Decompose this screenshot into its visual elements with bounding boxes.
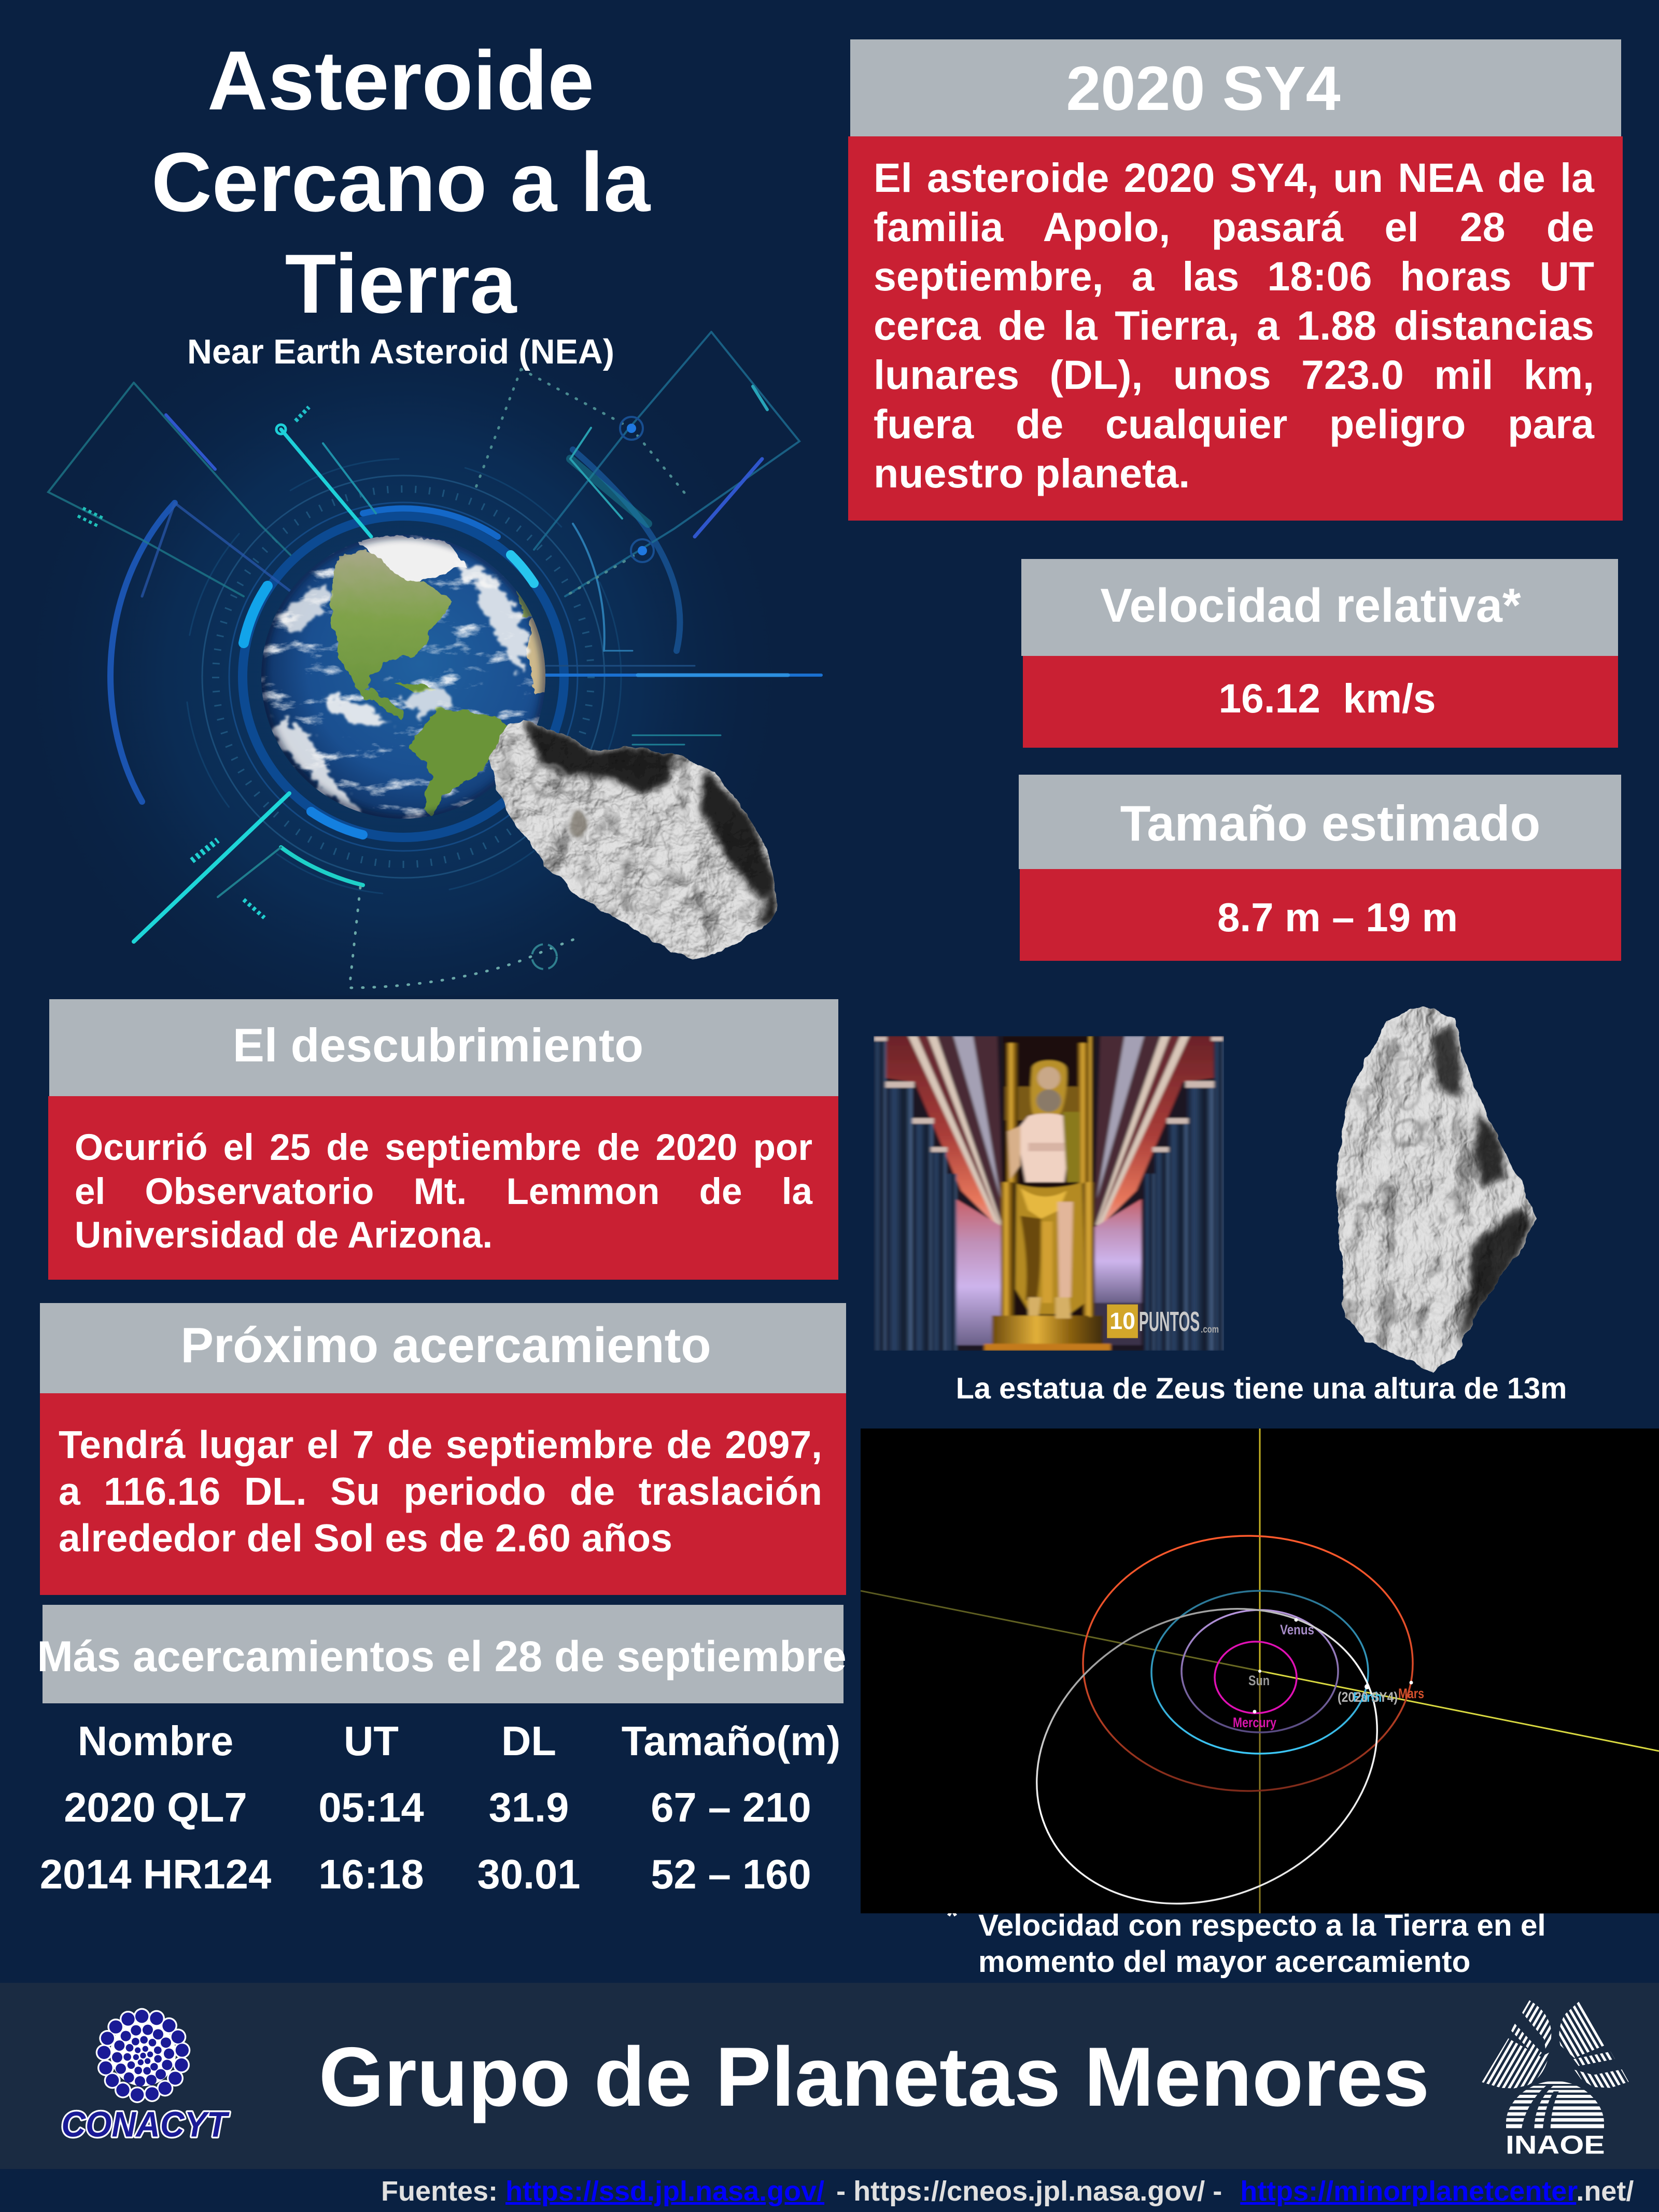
logo: CONACYT: CONACYT xyxy=(61,2105,230,2145)
footnote: Velocidad con respecto a la Tierra en el xyxy=(978,1909,1546,1942)
heading: velocidad relativa: Velocidad relativa* xyxy=(1100,579,1521,632)
text: summary: septiembre, a las 18:06 horas UT xyxy=(874,253,1594,299)
text: summary: familia Apolo, pasará el 28 de xyxy=(874,204,1594,250)
heading: el descubrimiento: El descubrimiento xyxy=(233,1019,643,1072)
red box: descubrimiento xyxy=(48,1096,838,1280)
footnote asterisk: * xyxy=(946,1899,958,1933)
planet labels: Mars xyxy=(1398,1686,1424,1701)
table: close approaches: UT xyxy=(344,1718,399,1764)
text: summary xyxy=(874,155,1595,496)
planets xyxy=(1253,1618,1413,1713)
columns xyxy=(874,1039,1224,1351)
table: close approaches xyxy=(31,1711,861,1903)
heading: tamano estimado: Tamaño estimado xyxy=(1120,796,1540,851)
title xyxy=(151,34,651,331)
limb shadow xyxy=(261,535,545,819)
table: close approaches: 31.9 xyxy=(489,1784,569,1830)
planet labels xyxy=(1233,1622,1424,1730)
outer arcs xyxy=(110,503,175,802)
header box: mas acercamientos xyxy=(43,1605,843,1703)
orbits xyxy=(988,1536,1426,1958)
text: proximo acercamiento: a 116.16 DL. Su periodo de traslación xyxy=(59,1469,822,1513)
text: proximo acercamiento: alrededor del Sol es de 2.60 años xyxy=(59,1516,672,1560)
text: descubrimiento: Ocurrió el 25 de septiembre de 2020 por xyxy=(75,1127,812,1168)
text: summary: lunares (DL), unos 723.0 mil km, xyxy=(874,352,1594,398)
table: close approaches: Nombre xyxy=(78,1718,233,1764)
footer band xyxy=(0,1983,1659,2169)
cloud layer under land xyxy=(261,535,540,819)
red box: proximo acercamiento xyxy=(40,1393,846,1595)
red box: summary xyxy=(848,136,1623,521)
logo: INAOE: INAOE xyxy=(1506,2130,1605,2159)
caption: Zeus statue: La estatua de Zeus tiene una altura de 13m xyxy=(956,1372,1567,1405)
value: velocidad: 16.12 km/s xyxy=(1218,676,1436,721)
illustration: Earth globe xyxy=(261,535,545,819)
watermark xyxy=(1107,1305,1138,1338)
artwork layer: PUNTOS xyxy=(1139,1306,1200,1337)
ceiling, left and right xyxy=(874,1036,1001,1230)
table: close approaches: 16:18 xyxy=(318,1851,424,1897)
planet labels: Earth xyxy=(1353,1689,1382,1705)
bright ring segments xyxy=(244,586,268,643)
table: close approaches: 2014 HR124 xyxy=(40,1851,271,1897)
table: close approaches: Tamaño(m) xyxy=(622,1718,840,1764)
illustration: asteroid at scale xyxy=(1327,1001,1545,1379)
sources: Fuentes: https://ssd.jpl.nasa.gov/ - https://cneos.jpl.nasa.gov/ - https://minorplanetcenter.net/ xyxy=(381,2176,1634,2207)
ray lines xyxy=(908,1036,1002,1229)
bright cyan lines xyxy=(281,429,371,537)
text: summary: El asteroide 2020 SY4, un NEA de la xyxy=(874,155,1594,201)
inner strips xyxy=(937,1036,1003,1227)
ice cap xyxy=(358,535,467,583)
figure xyxy=(1031,1060,1067,1117)
header box: proximo acercamiento xyxy=(40,1303,846,1393)
planet labels: Sun xyxy=(1248,1673,1270,1688)
illustration: asteroid beside Earth xyxy=(482,716,788,970)
text: summary: nuestro planeta. xyxy=(874,450,1190,496)
subtitle: Near Earth Asteroid (NEA) xyxy=(187,333,614,371)
table: close approaches: 05:14 xyxy=(318,1784,424,1830)
table: close approaches: 2020 QL7 xyxy=(64,1784,247,1830)
planet labels: Venus xyxy=(1280,1622,1314,1637)
table: close approaches: 67 – 210 xyxy=(651,1784,811,1830)
text: descubrimiento: Universidad de Arizona. xyxy=(75,1215,493,1256)
footer title: Grupo de Planetas Menores xyxy=(319,2030,1429,2124)
title: Cercano a la xyxy=(151,136,650,229)
wedges xyxy=(48,383,290,596)
text: summary: fuera de cualquier peligro para xyxy=(874,401,1594,447)
text: descubrimiento xyxy=(75,1127,813,1256)
logo: INAOE xyxy=(1482,2000,1629,2159)
continents xyxy=(332,535,550,817)
red box: velocidad xyxy=(1023,656,1618,748)
header box: velocidad xyxy=(1021,559,1618,656)
orbit diagram xyxy=(861,1429,1659,1958)
logo: CONACYT xyxy=(61,2008,230,2145)
text: proximo acercamiento xyxy=(59,1423,822,1560)
header box: tamano xyxy=(1019,775,1621,869)
cloud swirls xyxy=(275,560,529,814)
heading: 2020 SY4: 2020 SY4 xyxy=(1066,53,1341,123)
text: descubrimiento: el Observatorio Mt. Lemmon de la xyxy=(75,1171,812,1212)
heading: mas acercamientos: Más acercamientos el 28 de septiembre xyxy=(37,1632,847,1681)
heading: proximo acercamiento: Próximo acercamiento xyxy=(180,1318,711,1373)
illustration: statue of Zeus: 10 xyxy=(1109,1308,1135,1334)
illustration: statue of Zeus xyxy=(874,1036,1224,1351)
illustration: HUD background xyxy=(0,290,850,996)
table: close approaches: DL xyxy=(501,1718,556,1764)
footnote: momento del mayor acercamiento xyxy=(978,1945,1470,1979)
title: Tierra xyxy=(285,237,516,331)
table: close approaches: 52 – 160 xyxy=(651,1851,811,1897)
value: tamano: 8.7 m – 19 m xyxy=(1217,894,1458,940)
illustration: statue of Zeus: .com xyxy=(1201,1324,1219,1335)
table: close approaches: 30.01 xyxy=(477,1851,580,1897)
axes xyxy=(1259,1429,1261,1671)
header box: descubrimiento xyxy=(49,999,838,1096)
red box: tamano xyxy=(1020,869,1621,961)
throne xyxy=(1003,1036,1094,1317)
text: summary: cerca de la Tierra, a 1.88 distancias xyxy=(874,302,1594,348)
planet labels: Mercury xyxy=(1233,1715,1276,1730)
footnote xyxy=(978,1908,1600,1981)
glow xyxy=(956,1199,1003,1345)
planet labels: (2020 SY4) xyxy=(1338,1689,1398,1705)
header box: 2020 SY4 xyxy=(850,39,1621,136)
title: Asteroide xyxy=(207,34,594,128)
dotted links xyxy=(475,369,684,596)
text: proximo acercamiento: Tendrá lugar el 7 de septiembre de 2097, xyxy=(59,1423,822,1466)
